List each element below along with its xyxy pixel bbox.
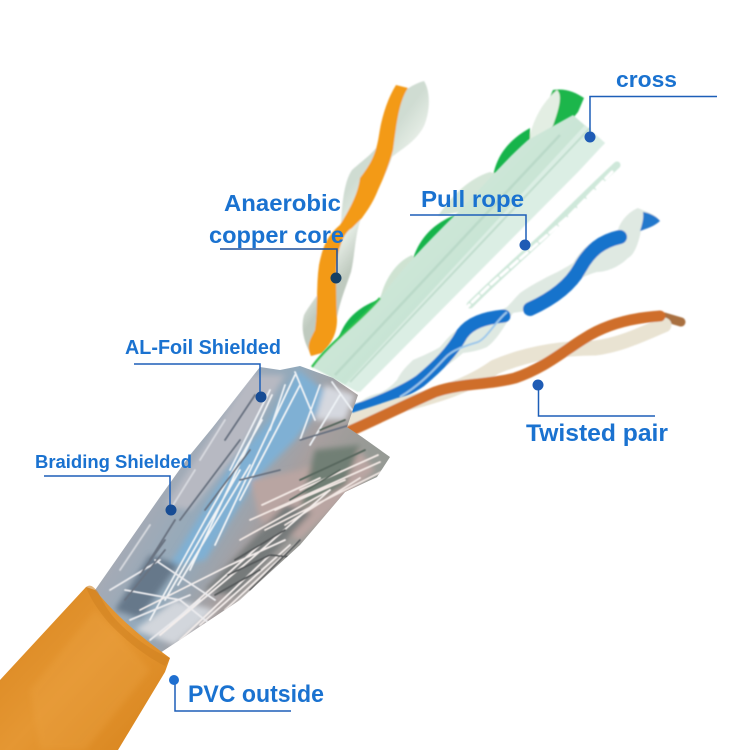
label: Braiding Shielded bbox=[35, 452, 192, 516]
label: Pull rope bbox=[410, 186, 530, 250]
label: Twisted pair: Twisted pair bbox=[526, 420, 668, 447]
foil and braid shield bbox=[93, 366, 390, 653]
green twisted pair bbox=[338, 89, 584, 340]
cross separator bbox=[312, 115, 605, 392]
label: PVC outside bbox=[169, 675, 324, 711]
label: Pull rope: Pull rope bbox=[421, 186, 524, 212]
brown twisted pair bbox=[348, 316, 681, 431]
label: Twisted pair bbox=[526, 380, 668, 447]
label: Anaerobic copper core: copper core bbox=[209, 222, 344, 248]
label: Braiding Shielded: Braiding Shielded bbox=[35, 452, 192, 472]
label: AL-Foil Shielded bbox=[125, 337, 281, 402]
pull rope bbox=[365, 165, 617, 393]
label: PVC outside: PVC outside bbox=[188, 681, 324, 708]
label: Anaerobic copper core bbox=[209, 190, 344, 284]
label: Anaerobic copper core: Anaerobic bbox=[224, 190, 341, 216]
label: cross bbox=[584, 67, 717, 142]
blue twisted pair bbox=[352, 208, 660, 413]
label: AL-Foil Shielded: AL-Foil Shielded bbox=[125, 337, 281, 359]
label: cross: cross bbox=[616, 67, 677, 92]
orange PVC jacket bbox=[0, 586, 170, 750]
orange twisted pair bbox=[303, 81, 429, 356]
